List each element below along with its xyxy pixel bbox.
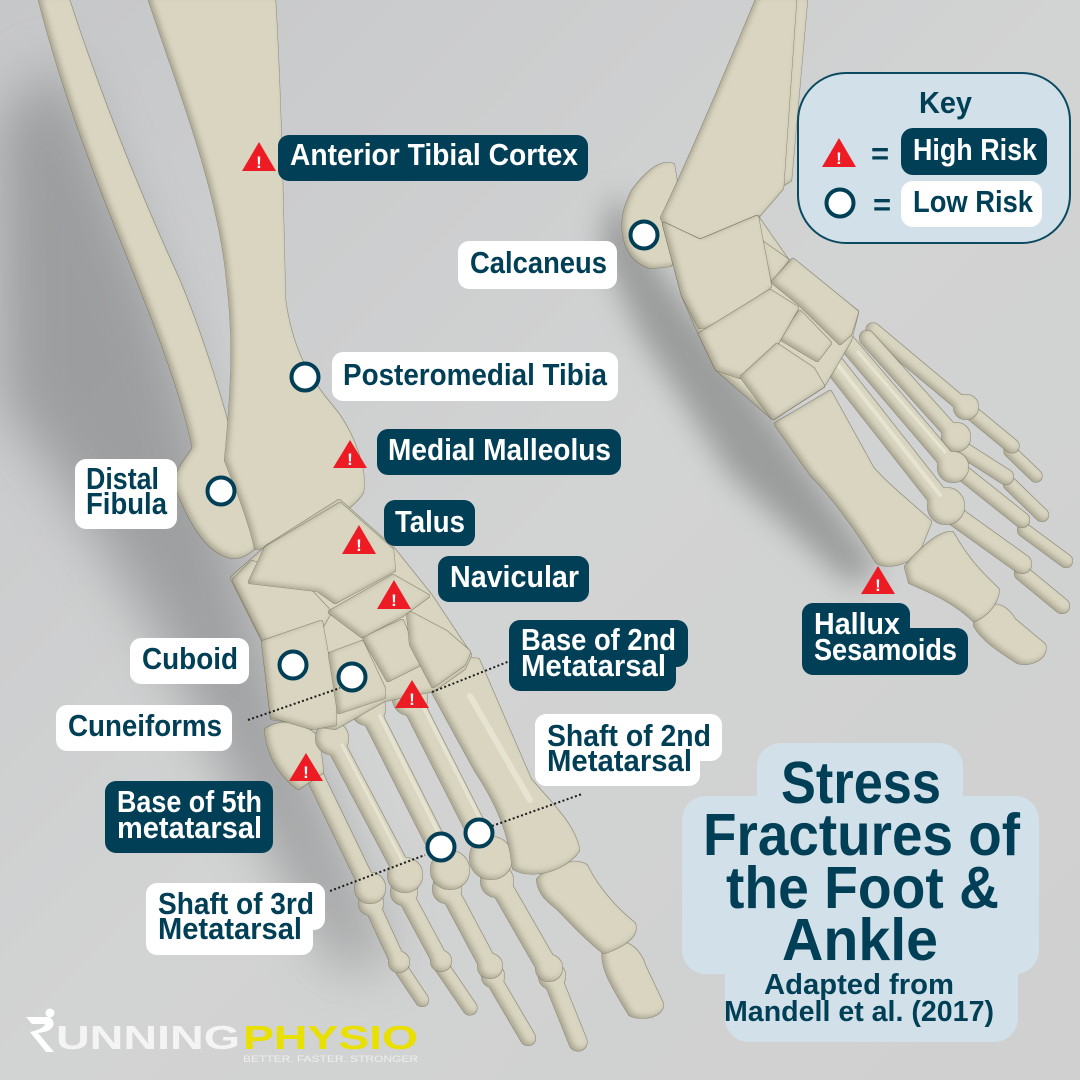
label: Distal Fibula <box>75 459 177 529</box>
label: Hallux Sesamoids: Hallux <box>814 606 901 641</box>
high risk marker: medial malleolus <box>333 440 367 469</box>
big toe proximal phalanx <box>538 863 635 952</box>
right toe 5 proximal <box>972 413 1012 446</box>
high risk marker: medial malleolus: ! <box>347 450 353 469</box>
toe 4 proximal <box>392 880 450 970</box>
label: Distal Fibula: Distal <box>86 461 159 496</box>
low risk marker: shaft of 3rd metatarsal <box>428 834 454 860</box>
label: Shaft of 3rd Metatarsal <box>146 883 325 955</box>
right heel <box>623 164 684 267</box>
right metatarsal 2 <box>827 356 963 523</box>
title text: Ankle <box>782 907 938 973</box>
label: Hallux Sesamoids: Sesamoids <box>814 632 957 667</box>
metatarsal 3 <box>352 692 468 888</box>
title text: Stress <box>781 750 941 816</box>
label: Cuneiforms <box>56 705 232 751</box>
dotted leader lines <box>248 657 582 891</box>
title text: the Foot & <box>726 855 999 921</box>
label: Base of 5th metatarsal: metatarsal <box>117 810 262 845</box>
right upper tarsals <box>773 260 857 343</box>
talus <box>250 504 394 602</box>
label: Calcaneus <box>458 241 617 289</box>
heel and lateral tarsals <box>234 562 330 640</box>
low risk marker: cuneiforms <box>338 664 366 690</box>
right metatarsal 5 <box>873 330 977 418</box>
label: Medial Malleolus: Medial Malleolus <box>388 432 611 467</box>
right fibula <box>780 0 806 186</box>
right navicular <box>700 291 797 377</box>
cuboid <box>263 622 335 728</box>
right toe 4 proximal <box>959 447 1006 477</box>
logo: Running Physio <box>26 1008 419 1064</box>
label: Base of 2nd Metatarsal: Base of 2nd <box>521 622 676 657</box>
right skeleton foot and leg <box>623 0 1066 663</box>
high risk marker: talus: ! <box>356 536 362 555</box>
lateral cuneiform <box>330 642 384 712</box>
label: Hallux Sesamoids <box>802 603 968 675</box>
high risk marker: anterior tibial cortex <box>242 142 276 172</box>
right navicular cuneiforms <box>757 239 787 282</box>
title panel <box>682 743 1039 1042</box>
label: Base of 5th metatarsal <box>105 781 273 853</box>
right tarsal mass <box>664 217 857 418</box>
high risk marker: base of 5th metatarsal <box>289 753 323 782</box>
toe 5 proximal <box>360 892 408 971</box>
right small cuneiform <box>780 312 830 360</box>
left skeleton foot and leg <box>40 0 662 1042</box>
label: Cuneiforms: Cuneiforms <box>68 708 222 743</box>
tarsal bones mass <box>232 501 470 728</box>
label: Anterior Tibial Cortex <box>278 135 588 181</box>
label: Shaft of 3rd Metatarsal: Shaft of 3rd <box>158 886 314 921</box>
label: Cuboid <box>130 638 249 684</box>
key low risk row: Low Risk <box>913 184 1034 219</box>
right tibia <box>662 0 795 241</box>
right metatarsal 4 <box>867 338 969 450</box>
key low risk row <box>826 181 1042 227</box>
key high risk row: ! <box>836 149 842 168</box>
metatarsal 5 base <box>266 724 322 788</box>
metatarsal 2 <box>394 682 511 878</box>
low risk marker: calcaneus <box>630 222 658 248</box>
label: Navicular <box>438 556 589 602</box>
label: Shaft of 2nd Metatarsal: Shaft of 2nd <box>547 718 711 753</box>
right toe 3 proximal <box>958 469 1022 520</box>
citation <box>724 969 994 1028</box>
citation: Adapted from <box>764 969 954 1001</box>
high risk marker: navicular: ! <box>391 591 397 610</box>
right toe 2 proximal <box>955 516 1022 564</box>
intermediate cuneiform <box>364 621 420 680</box>
toes left foot <box>402 970 422 1000</box>
key panel <box>798 73 1070 243</box>
big toe distal phalanx <box>603 943 662 1017</box>
key heading: Key <box>919 85 973 120</box>
low risk marker: posteromedial tibia <box>292 364 318 390</box>
metatarsal 5 <box>308 762 384 902</box>
fibula <box>40 0 263 557</box>
key high risk row: High Risk <box>913 132 1038 167</box>
title text: Fractures of <box>703 802 1020 868</box>
toe 2 proximal <box>482 866 561 980</box>
logo mark <box>26 1008 54 1052</box>
label: Base of 2nd Metatarsal: Metatarsal <box>521 648 666 683</box>
right big toe distal <box>975 605 1045 663</box>
metatarsal 4 <box>317 723 421 891</box>
right toe 3 <box>1024 530 1066 561</box>
toe 2 middle and distal <box>540 964 578 1042</box>
label: Shaft of 2nd Metatarsal <box>535 714 722 786</box>
high risk marker: base of 2nd metatarsal: ! <box>409 690 415 709</box>
right toe 4 <box>1010 484 1042 515</box>
label: Base of 5th metatarsal: Base of 5th <box>117 784 262 819</box>
right metatarsal 1 <box>776 392 930 565</box>
key high risk row: = <box>871 136 889 171</box>
right big toe proximal <box>906 533 998 620</box>
cast shadows <box>0 60 880 970</box>
label: Calcaneus: Calcaneus <box>470 245 607 280</box>
right talus <box>664 217 770 327</box>
high risk marker: hallux sesamoids: ! <box>875 576 881 595</box>
logo: Running Physio: PHYSIO <box>243 1019 418 1056</box>
title text <box>703 750 1020 973</box>
label: Base of 2nd Metatarsal <box>509 620 688 691</box>
high risk marker: base of 5th metatarsal: ! <box>303 763 309 782</box>
medial cuneiform <box>408 612 469 686</box>
logo: Running Physio: UNNING <box>56 1019 240 1056</box>
right toes <box>1010 451 1036 476</box>
label: Posteromedial Tibia: Posteromedial Tibia <box>343 357 608 392</box>
toe 3 middle and distal <box>483 966 528 1038</box>
high risk marker: base of 2nd metatarsal <box>395 680 429 709</box>
label: Talus: Talus <box>395 504 465 539</box>
navicular <box>330 576 428 636</box>
label: Posteromedial Tibia <box>332 352 618 401</box>
low risk marker: cuboid <box>280 652 306 678</box>
high risk marker: navicular <box>377 580 411 610</box>
low risk marker: shaft of 2nd metatarsal <box>466 820 492 846</box>
key low risk row: = <box>873 187 891 222</box>
high risk marker: anterior tibial cortex: ! <box>256 153 262 172</box>
high risk marker: hallux sesamoids <box>861 566 895 595</box>
label: Cuboid: Cuboid <box>142 641 238 676</box>
label: Shaft of 2nd Metatarsal: Metatarsal <box>547 743 692 778</box>
label: Distal Fibula: Fibula <box>86 486 168 521</box>
logo: Running Physio: BETTER. FASTER. STRONGER <box>243 1054 419 1064</box>
tibia <box>150 0 363 548</box>
label: Navicular: Navicular <box>450 559 579 594</box>
key high risk row <box>822 128 1047 175</box>
toe 3 proximal <box>434 876 501 977</box>
high risk marker: talus <box>342 525 376 555</box>
label: Medial Malleolus <box>377 429 621 475</box>
label: Talus <box>384 500 475 546</box>
toe 4 distal <box>442 967 470 1008</box>
right medial cuneiform <box>742 345 823 418</box>
right metatarsal 3 <box>847 343 967 481</box>
low risk marker: distal fibula <box>208 478 234 504</box>
label: Anterior Tibial Cortex: Anterior Tibial Cortex <box>290 137 579 172</box>
citation: Mandell et al. (2017) <box>724 996 994 1028</box>
metatarsal 1 <box>430 659 578 873</box>
right toe 2 <box>1022 573 1062 606</box>
label: Shaft of 3rd Metatarsal: Metatarsal <box>158 911 302 946</box>
